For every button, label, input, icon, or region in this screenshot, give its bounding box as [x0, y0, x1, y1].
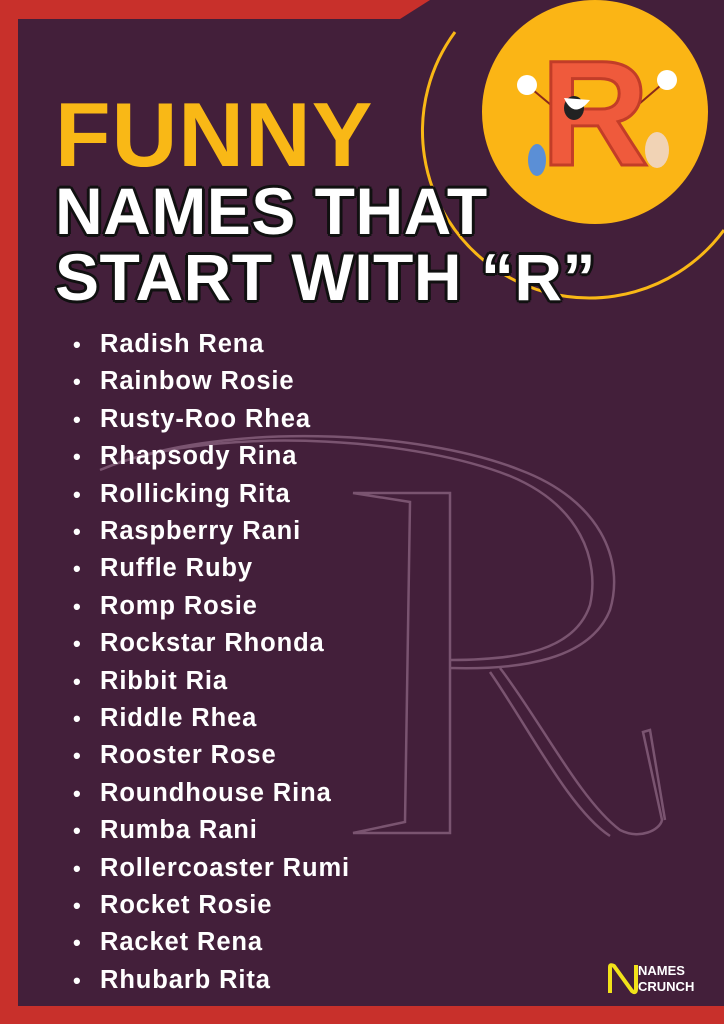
red frame: bottom [0, 1006, 724, 1024]
text: • [73, 856, 81, 881]
text: • [73, 556, 81, 581]
logo: names crunch: NAMES [638, 963, 685, 978]
mascot circle [482, 0, 708, 224]
text: Rollicking Rita [100, 480, 291, 508]
text: • [73, 444, 81, 469]
text: • [73, 930, 81, 955]
text: • [73, 519, 81, 544]
text: • [73, 407, 81, 432]
text: Rollercoaster Rumi [100, 854, 350, 882]
text: • [73, 968, 81, 993]
text: • [73, 781, 81, 806]
icon: R mascot: R [541, 29, 649, 197]
text: Ribbit Ria [100, 667, 228, 695]
logo: names crunch [608, 963, 694, 994]
red frame: left [0, 0, 18, 1024]
text: • [73, 893, 81, 918]
text: Rainbow Rosie [100, 367, 294, 395]
text: • [73, 669, 81, 694]
text: Rumba Rani [100, 816, 258, 844]
text: FUNNY [55, 85, 373, 186]
text: • [73, 332, 81, 357]
text: START WITH “R” [55, 240, 596, 314]
logo: names crunch: CRUNCH [638, 979, 694, 994]
text: Rooster Rose [100, 741, 277, 769]
text: • [73, 594, 81, 619]
text: Rockstar Rhonda [100, 629, 325, 657]
text: Rusty-Roo Rhea [100, 405, 311, 433]
text: • [73, 706, 81, 731]
text: • [73, 818, 81, 843]
text: Riddle Rhea [100, 704, 257, 732]
text: Rhubarb Rita [100, 966, 271, 994]
text: • [73, 743, 81, 768]
text: • [73, 482, 81, 507]
text: • [73, 369, 81, 394]
text: Rhapsody Rina [100, 442, 297, 470]
red frame: top [18, 0, 430, 19]
yellow ring arc [420, 31, 724, 300]
text: Romp Rosie [100, 592, 258, 620]
names list [73, 330, 350, 994]
text: Racket Rena [100, 928, 263, 956]
text: Rocket Rosie [100, 891, 272, 919]
text: • [73, 631, 81, 656]
text: NAMES THAT [55, 174, 488, 248]
text: Ruffle Ruby [100, 554, 253, 582]
title [54, 85, 596, 314]
text: Roundhouse Rina [100, 779, 332, 807]
icon: R mascot [517, 29, 677, 197]
text: Radish Rena [100, 330, 264, 358]
text: Raspberry Rani [100, 517, 301, 545]
